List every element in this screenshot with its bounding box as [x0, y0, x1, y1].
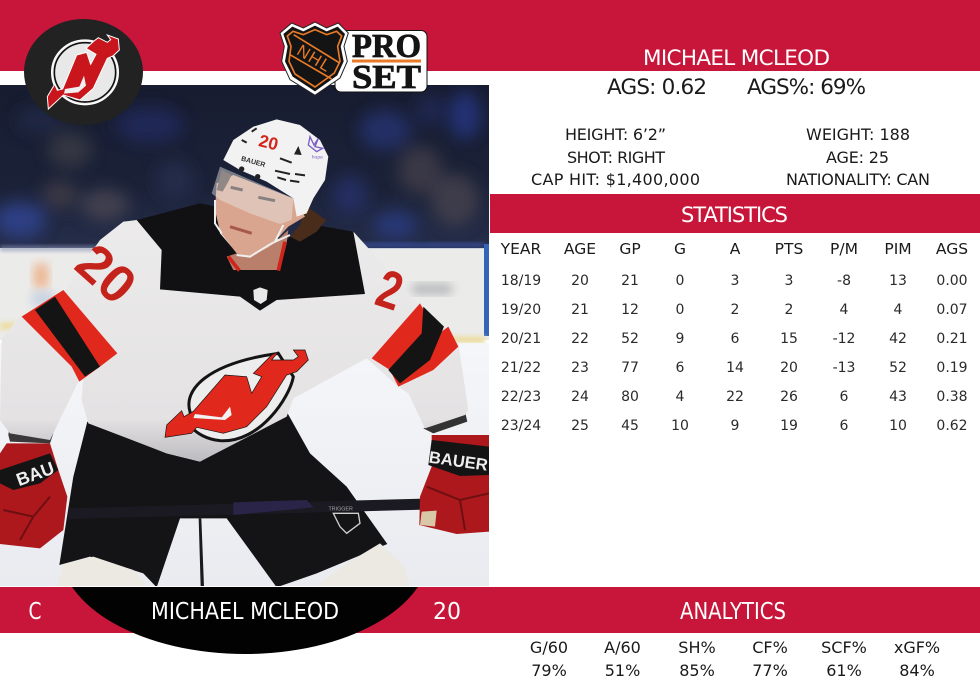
black name oval — [72, 587, 418, 654]
table header: YEAR — [500, 240, 542, 258]
player bio left column: SHOT: RIGHT — [567, 148, 665, 167]
row 23/24: 9 — [731, 418, 739, 434]
analytics values: 77% — [752, 661, 788, 680]
row 23/24: 10 — [671, 418, 689, 434]
bottom red banner — [0, 587, 980, 633]
helmet: 20 — [257, 130, 280, 154]
row 22/23: 80 — [621, 389, 639, 405]
row 22/23: 6 — [840, 389, 849, 405]
analytics heading: ANALYTICS — [680, 599, 786, 625]
NHL neck crest — [253, 287, 268, 304]
row 20/21 — [501, 331, 968, 347]
row 20/21: -12 — [833, 331, 855, 347]
chin strap — [215, 200, 290, 257]
row 20/21: 15 — [780, 331, 798, 347]
analytics headers: A/60 — [604, 638, 641, 657]
row 19/20: 0 — [676, 302, 684, 318]
statistics banner — [490, 194, 980, 233]
top red banner — [0, 0, 980, 71]
row 18/19: 0 — [676, 273, 684, 289]
analytics headers: xGF% — [894, 638, 940, 657]
helmet: BAUER — [240, 156, 266, 169]
left sleeve black stripe — [35, 297, 100, 377]
jersey number: 20 — [433, 599, 461, 625]
sleeve number right: 2 — [369, 258, 410, 323]
right sock — [315, 543, 409, 587]
player head — [212, 119, 328, 271]
orange rule — [352, 60, 421, 62]
table header: A — [730, 240, 741, 258]
player bio right column — [786, 125, 930, 189]
right wrist tape — [423, 412, 467, 433]
row 19/20: 2 — [785, 302, 793, 318]
row 19/20: 0.07 — [936, 302, 968, 318]
row 18/19: 13 — [889, 273, 907, 289]
row 18/19: 20 — [571, 273, 589, 289]
row 22/23: 22 — [726, 389, 744, 405]
row 21/22: 77 — [621, 360, 639, 376]
table header — [500, 240, 968, 258]
table header: P/M — [830, 240, 858, 258]
right glove: BAUER — [428, 448, 489, 475]
player bio right column: WEIGHT: 188 — [806, 125, 910, 144]
row 20/21: 6 — [731, 331, 740, 347]
helmet — [223, 119, 328, 217]
left sleeve red stripes — [22, 290, 117, 382]
row 20/21: 22 — [571, 331, 589, 347]
jersey body and sleeves — [0, 220, 468, 462]
row 18/19: 3 — [785, 273, 793, 289]
row 23/24: 25 — [571, 418, 589, 434]
position label: C — [28, 599, 42, 625]
row 23/24: 19 — [780, 418, 798, 434]
left wrist tape — [8, 432, 54, 444]
statistics table — [500, 240, 968, 434]
table header: PIM — [884, 240, 912, 258]
table header: GP — [619, 240, 641, 258]
right glove — [419, 435, 489, 534]
player bio left column — [531, 125, 700, 189]
helmet: hope — [312, 154, 323, 160]
row 19/20: 12 — [621, 302, 639, 318]
hair — [290, 207, 326, 242]
NHL shield: NHL — [294, 41, 335, 76]
row 21/22: 21/22 — [501, 360, 541, 376]
statistics banner: STATISTICS — [681, 203, 788, 227]
row 20/21: 20/21 — [501, 331, 541, 347]
pants — [59, 412, 387, 587]
analytics headers: G/60 — [530, 638, 568, 657]
eyes — [231, 187, 275, 201]
row 18/19: -8 — [837, 273, 851, 289]
stick shaft behind — [199, 518, 204, 587]
table header: AGS — [936, 240, 968, 258]
Pro Set logo — [280, 22, 427, 96]
jersey devils crest — [165, 350, 308, 441]
player bio left column: CAP HIT: $1,400,000 — [531, 170, 700, 189]
sleeve number left: 20 — [64, 233, 147, 316]
hockey player — [0, 203, 489, 587]
row 18/19: 3 — [731, 273, 739, 289]
analytics values — [531, 661, 935, 680]
row 19/20: 19/20 — [501, 302, 541, 318]
left glove — [0, 443, 67, 548]
table header: AGE — [564, 240, 596, 258]
row 19/20: 4 — [840, 302, 849, 318]
row 23/24: 23/24 — [501, 418, 541, 434]
row 18/19: 18/19 — [501, 273, 541, 289]
socks — [57, 557, 147, 587]
table header: G — [674, 240, 686, 258]
analytics headers: CF% — [752, 638, 788, 657]
analytics values: 61% — [826, 661, 862, 680]
analytics headers: SCF% — [821, 638, 867, 657]
row 18/19: 21 — [621, 273, 639, 289]
nameplate: MICHAEL MCLEOD — [151, 599, 339, 625]
heading: player name: MICHAEL MCLEOD — [643, 46, 830, 71]
player bio right column: NATIONALITY: CAN — [786, 170, 930, 189]
row 19/20: 4 — [894, 302, 903, 318]
row 22/23: 26 — [780, 389, 798, 405]
player bio left column: HEIGHT: 6’2” — [565, 125, 666, 144]
row 23/24: 10 — [889, 418, 907, 434]
PRO wordmark: PRO — [352, 28, 421, 65]
player bio right column: AGE: 25 — [826, 148, 889, 167]
ice surface — [0, 343, 489, 587]
row 21/22: -13 — [833, 360, 855, 376]
row 19/20 — [501, 302, 968, 318]
face — [215, 175, 305, 257]
row 23/24: 6 — [840, 418, 849, 434]
mouth — [230, 227, 252, 233]
stick — [68, 498, 435, 519]
left glove: BAU — [13, 458, 57, 490]
row 22/23 — [501, 389, 968, 405]
row 20/21: 52 — [621, 331, 639, 347]
hair under visor — [217, 170, 232, 192]
stick: TRIGGER — [329, 507, 353, 513]
arena crowd background — [0, 85, 489, 253]
row 21/22: 0.19 — [936, 360, 968, 376]
row 22/23: 22/23 — [501, 389, 541, 405]
row 19/20: 21 — [571, 302, 589, 318]
rink boards — [0, 243, 489, 344]
AGS score: AGS: 0.62 — [607, 75, 707, 100]
row 23/24 — [501, 418, 968, 434]
logo plate — [335, 30, 427, 92]
row 21/22: 6 — [676, 360, 685, 376]
row 20/21: 42 — [889, 331, 907, 347]
table header: PTS — [775, 240, 803, 258]
neck — [227, 230, 288, 270]
SET wordmark: SET — [352, 59, 421, 96]
row 22/23: 43 — [889, 389, 907, 405]
row 20/21: 9 — [676, 331, 684, 347]
row 18/19 — [501, 273, 968, 289]
row 21/22 — [501, 360, 968, 376]
analytics headers — [530, 638, 940, 657]
row 22/23: 0.38 — [936, 389, 968, 405]
player photo — [0, 85, 489, 587]
analytics values: 51% — [605, 661, 640, 680]
row 18/19: 0.00 — [936, 273, 968, 289]
right sleeve black stripe — [388, 307, 444, 383]
pants crest — [333, 513, 360, 533]
AGS percent: AGS%: 69% — [747, 75, 866, 100]
row 19/20: 2 — [731, 302, 739, 318]
analytics values: 84% — [899, 661, 935, 680]
row 23/24: 0.62 — [936, 418, 968, 434]
NHL shield — [280, 22, 348, 95]
row 21/22: 52 — [889, 360, 907, 376]
row 20/21: 0.21 — [936, 331, 968, 347]
row 22/23: 4 — [676, 389, 685, 405]
row 22/23: 24 — [571, 389, 589, 405]
right sleeve red stripes — [372, 303, 458, 387]
analytics values: 85% — [679, 661, 715, 680]
visor — [212, 167, 293, 224]
collar — [228, 242, 285, 271]
row 21/22: 23 — [571, 360, 589, 376]
analytics headers: SH% — [678, 638, 716, 657]
black yoke — [137, 203, 365, 311]
row 21/22: 20 — [780, 360, 798, 376]
row 21/22: 14 — [726, 360, 744, 376]
analytics values: 79% — [531, 661, 567, 680]
team logo puck — [24, 19, 143, 125]
row 23/24: 45 — [621, 418, 639, 434]
